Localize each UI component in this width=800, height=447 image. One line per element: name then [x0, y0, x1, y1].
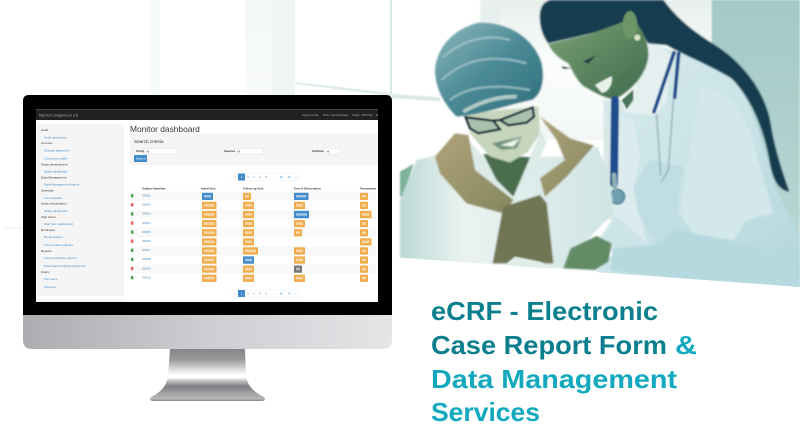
subject identifiers: S0003 [142, 212, 151, 216]
patient hair highlights [442, 37, 530, 112]
pagination top: « [234, 175, 236, 179]
monitor stand [150, 349, 265, 401]
top navigation bar: http://cr1.magnet.cor 3.8 [39, 113, 78, 117]
search criteria panel: All [146, 149, 149, 153]
pagination bottom: « [234, 292, 236, 296]
sidebar menu: Data Management history [44, 182, 80, 186]
pagination bottom: 5 [265, 292, 267, 296]
pagination bottom: ... [272, 292, 274, 296]
search criteria panel: All [237, 149, 240, 153]
pagination bottom: 2 [247, 292, 249, 296]
doctor hair [540, 0, 789, 192]
pagination top: 18 [279, 175, 283, 179]
subject identifiers: S0002 [142, 203, 151, 207]
subject identifiers [142, 194, 151, 279]
subject identifiers: S0004 [142, 221, 151, 225]
patient sweater [400, 147, 613, 268]
search criteria panel: All [326, 149, 329, 153]
monitor chin [23, 315, 392, 349]
sidebar menu: Enroll subject [44, 235, 63, 239]
subject identifiers: S0007 [142, 248, 151, 252]
sidebar menu: Sign form dashboard [44, 222, 73, 226]
background: faded window ghost [4, 0, 393, 228]
sidebar menu: Sign forms [41, 215, 56, 219]
search criteria panel: Species: [224, 149, 236, 153]
sidebar menu: List access tasks [44, 156, 68, 160]
doctor coat [597, 43, 800, 293]
sidebar menu: Enrolment [41, 228, 55, 232]
subject identifiers: S0001 [142, 194, 151, 198]
search criteria panel: Institute: [312, 149, 325, 153]
title: eCRF - Electronic [431, 296, 658, 326]
pagination bottom: 18 [279, 292, 283, 296]
table header: Subject Identifier [142, 186, 166, 190]
search criteria panel [130, 133, 378, 165]
table header: End of Observation [294, 186, 321, 190]
table header: Termination [360, 186, 377, 190]
dashboard heading: Monitor dashboard [130, 124, 200, 134]
pagination top: 1 [241, 175, 243, 179]
title: Data Management [431, 364, 677, 394]
pagination top: 5 [265, 175, 267, 179]
title [431, 296, 697, 427]
table header: Follow up Visit [243, 186, 263, 190]
pagination top: 19 [287, 175, 291, 179]
pagination bottom: 19 [287, 292, 291, 296]
sidebar menu: Schedule [41, 188, 54, 192]
top navigation bar: Study: TESTS1 [352, 113, 373, 117]
search criteria panel: Search criteria [134, 139, 164, 144]
sidebar menu: Audit [41, 128, 48, 132]
subject identifiers: S0008 [142, 257, 151, 261]
patient face [463, 107, 540, 163]
patient glasses [466, 107, 534, 133]
sidebar menu: List schedule [44, 196, 62, 200]
top navigation bar [36, 109, 378, 120]
title: Services [431, 397, 540, 427]
visit action buttons [202, 193, 372, 282]
pagination bottom: 4 [259, 292, 261, 296]
doctor face [548, 11, 648, 109]
subject identifiers: S0010 [142, 275, 151, 279]
patient scarf [435, 117, 594, 263]
subject identifiers: S0006 [142, 239, 151, 243]
sidebar menu: List users [44, 277, 58, 281]
top navigation bar: E [376, 113, 378, 117]
sidebar menu: Add user [44, 285, 56, 289]
pagination bottom: 3 [253, 292, 255, 296]
patient shirt [470, 131, 547, 186]
sidebar menu: Change password [44, 148, 69, 152]
pagination top: » [295, 175, 297, 179]
photo: doctor and patient [390, 0, 800, 293]
top navigation bar: swept prods [302, 113, 319, 117]
screen: dashboard [36, 109, 378, 302]
sidebar menu: Download Predefined Reports [44, 264, 86, 268]
monitor [23, 95, 392, 401]
subject status flags [131, 194, 133, 279]
pagination bottom: 1 [241, 292, 243, 296]
table row striping [130, 192, 377, 273]
table header: Initial Visit [201, 186, 215, 190]
top navigation bar: Role: Administrator [323, 113, 348, 117]
sidebar menu: Users [41, 270, 50, 274]
patient hair [435, 23, 543, 117]
photo background wall [390, 0, 800, 293]
sidebar menu: Study visualization [41, 202, 67, 206]
hands [563, 236, 612, 270]
search criteria panel: Study: [136, 149, 145, 153]
subject identifiers: S0005 [142, 230, 151, 234]
pagination bottom: » [295, 292, 297, 296]
stethoscope [610, 53, 679, 204]
sidebar menu [37, 124, 124, 302]
sidebar menu: Reports [41, 249, 52, 253]
patient inner top [483, 154, 530, 197]
sidebar menu: Study dashboard [44, 209, 68, 213]
search criteria panel: Search [136, 157, 146, 161]
sidebar menu: List enrolled subjects [44, 243, 73, 247]
pagination top [232, 174, 299, 180]
title: Case Report Form [431, 330, 667, 360]
title: & [675, 330, 697, 360]
sidebar menu: Study dashboard [44, 170, 68, 174]
pagination bottom [232, 290, 299, 297]
subject identifiers: S0009 [142, 266, 151, 270]
pagination top: ... [272, 175, 274, 179]
monitor bezel [23, 95, 392, 315]
table header [142, 186, 377, 190]
sidebar menu: Data Management [41, 176, 67, 180]
sidebar menu: List surveillance reports [44, 256, 77, 260]
pagination top: 3 [253, 175, 255, 179]
pagination top: 4 [259, 175, 261, 179]
sidebar menu: Study development [41, 162, 68, 166]
sidebar menu: Account [41, 141, 52, 145]
pagination top: 2 [247, 175, 249, 179]
sidebar menu: Audit dashboard [44, 136, 67, 140]
